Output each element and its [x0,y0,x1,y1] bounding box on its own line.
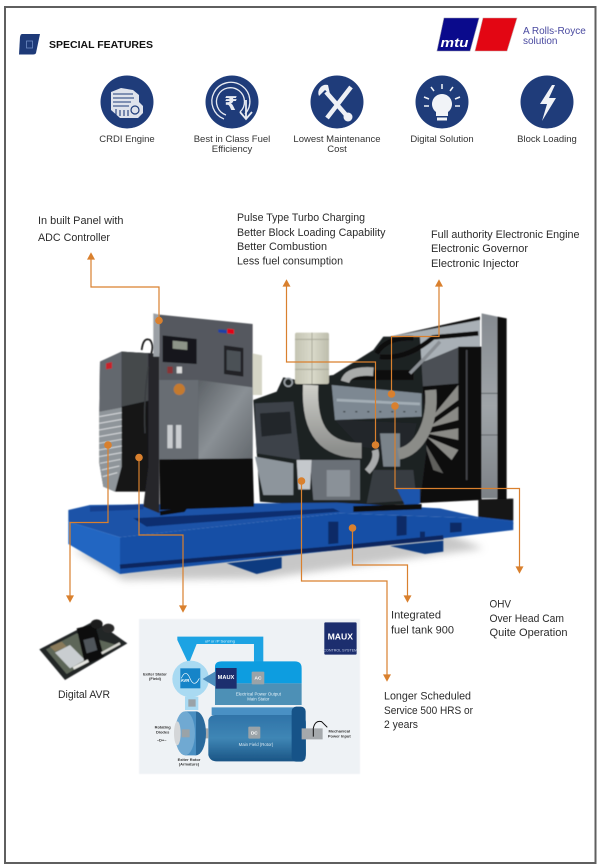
arrow: electronic engine [388,280,442,397]
radiator [390,313,513,523]
logo: tagline: solution [523,36,557,47]
callout text: electronic engine: Electronic Injector [431,258,519,270]
rotation arrow [313,721,327,737]
arrow: panel [88,254,162,324]
fuel filter [297,460,312,489]
main stator: Electrical Power Output [236,691,282,696]
feature: fuel efficiency [194,76,270,155]
feature: lowest maintenance cost [293,76,381,155]
callout text: fuel tank [391,610,454,636]
main stator: Main Stator [247,697,270,702]
icon: lightning bolt [520,76,574,128]
arrow: fuel tank [349,525,410,602]
air filter [295,333,329,384]
callout text: longer service: Service 500 HRS or [384,705,473,717]
caption: Block Loading [517,134,577,145]
logo: red block [475,18,517,51]
badge: MAUX [323,622,357,655]
logo: tagline: A Rolls-Royce [523,26,586,37]
callout text: OHV [490,598,568,639]
diagram labels: (Armature) [179,762,200,767]
callout text: OHV: Quite Operation [490,627,568,639]
diagram labels: Mechanical [329,729,350,734]
diagram labels: Exiter Rotor [178,757,201,762]
icon: light bulb [416,76,468,128]
MAUX controller [216,668,237,689]
callout text: electronic engine: Electronic Governor [431,243,528,255]
main field rotor: Main Field (Rotor) [239,742,274,747]
diagram labels [143,672,351,767]
arrow: OHV [392,403,522,572]
caption: Digital Solution [410,134,474,145]
diagram labels: Rotating [155,725,171,730]
caption: digital AVR: Digital AVR [58,689,110,701]
callout text: OHV: Over Head Cam [490,613,564,625]
diagram labels: (Field) [149,676,162,681]
callout text: turbo charging: Better Block Loading Capability [237,227,386,239]
feature: CRDI engine [99,76,155,145]
caption: Cost [327,144,347,155]
header badge icon [19,34,40,54]
callout text: longer service: 2 years [384,719,418,731]
callout arrows [67,254,522,680]
caption: Lowest Maintenance [293,134,381,145]
callout text: fuel tank: Integrated [391,610,441,622]
main field rotor [208,707,306,762]
icon: wrench and screwdriver [310,76,364,128]
icon: engine [100,76,154,128]
main field rotor: DC [251,730,258,735]
control panel [142,313,254,513]
shaft [198,728,323,739]
callout text: electronic engine: Full authority Electronic Engine [431,229,580,241]
main stator: AC [254,676,262,682]
caption: Efficiency [212,144,252,155]
MAUX controller: MAUX [218,675,235,681]
callout text: panel [38,215,124,244]
cooling fan [423,385,458,473]
badge: MAUX: CONTROL SYSTEM [323,649,357,653]
badge: MAUX: MAUX [328,631,353,641]
arrow: alternator excitation [136,454,186,612]
callout text: panel: In built Panel with [38,215,124,227]
diagram background [139,619,360,774]
callout text: turbo charging [237,212,386,268]
logo: mtu a Rolls-Royce solution [437,18,586,51]
feature: block loading [517,76,577,145]
feature: digital solution [410,76,474,145]
main stator [215,661,302,705]
arrow: digital AVR [67,442,111,602]
callout text: turbo charging: Better Combustion [237,241,327,253]
exciter rotor [174,711,206,755]
diagram labels: Power Input [328,733,351,738]
diagram labels: Diodes [156,729,170,734]
logo: mtu blue block: mtu [440,35,469,50]
caption: CRDI Engine [99,134,155,145]
base frame [68,488,513,574]
hoses [377,333,478,373]
alternator [99,352,152,492]
diagram labels: –D+– [157,737,167,742]
callout text: electronic engine [431,229,580,270]
engine block [253,337,427,508]
heading: special features: SPECIAL FEATURES [49,40,153,51]
callout text: longer service [384,690,473,731]
arrow: turbo charging [284,280,379,448]
photo: digital AVR board [39,619,127,680]
sensing loop [177,637,263,664]
diagram labels: Exiter Stator [143,672,167,677]
callout text: longer service: Longer Scheduled [384,690,471,702]
rear filter [253,353,262,395]
arrow: longer service [298,478,390,680]
logo: mtu blue block [437,18,479,51]
exciter stator with AVR: AVR [181,678,190,683]
intake pipes [310,371,431,472]
generator set photo [68,313,513,580]
callout text: turbo charging: Pulse Type Turbo Charging [237,212,365,224]
callout text: fuel tank: fuel tank 900 [391,624,454,636]
callout text: turbo charging: Less fuel consumption [237,256,343,268]
sensing loop: uP or rP Sensing [205,638,235,643]
caption: Best in Class Fuel [194,134,270,145]
ground shadow [73,533,483,580]
callout text: OHV: OHV [490,598,512,610]
callout text: panel: ADC Controller [38,232,110,244]
diagram: excitation system [139,619,360,774]
icon: rupee with down arrow: ₹ [224,93,238,115]
exciter stator with AVR [172,661,217,710]
